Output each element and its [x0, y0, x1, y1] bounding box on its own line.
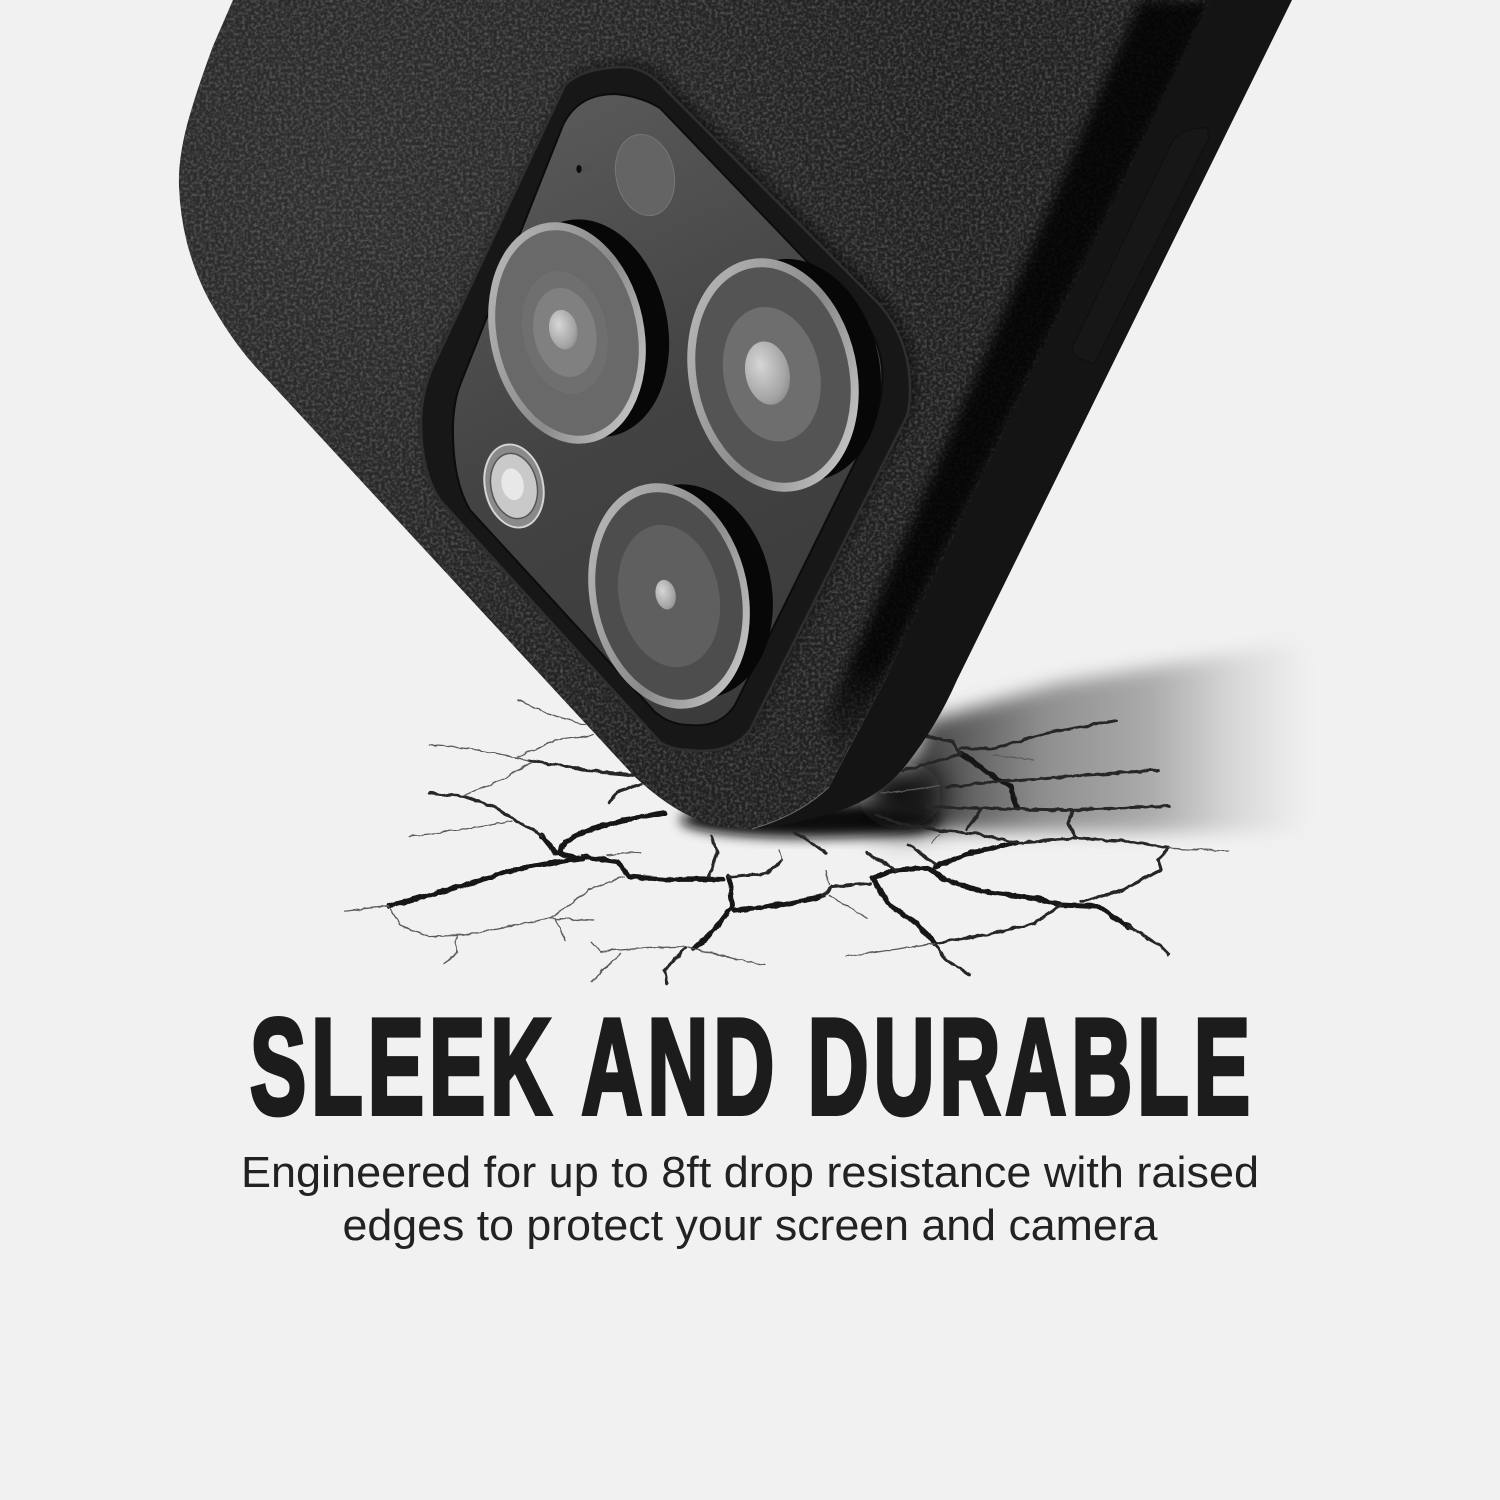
title: SLEEK AND DURABLE: [250, 991, 1250, 1142]
phone back with leather texture: [170, 0, 1250, 840]
subtitle: edges to protect your screen and camera: [342, 1201, 1158, 1250]
camera bump soft shadow: [426, 62, 915, 746]
cracked floor: [345, 700, 1228, 983]
hairline cracks: [345, 700, 1228, 982]
medium cracks: [430, 721, 1169, 983]
flash: [477, 439, 551, 533]
lens: right: [666, 237, 902, 508]
camera bump raised rim: [421, 67, 910, 751]
lens: top left: [468, 202, 689, 459]
lens: bottom: [568, 463, 793, 724]
subtitle: [241, 1148, 1259, 1250]
edge highlight at phone tip: [752, 787, 829, 829]
microphone: [576, 165, 593, 173]
heavy cracks: [389, 753, 1128, 949]
subtitle: Engineered for up to 8ft drop resistance with raised: [241, 1148, 1259, 1197]
phone body: [170, 0, 1292, 840]
floor shadow behind phone: [680, 640, 1315, 838]
camera island: [421, 62, 915, 751]
lidar sensor: [608, 129, 682, 221]
phone side wall: [752, 0, 1292, 829]
phone side button: [1072, 128, 1209, 364]
camera glass plate: [453, 94, 882, 725]
